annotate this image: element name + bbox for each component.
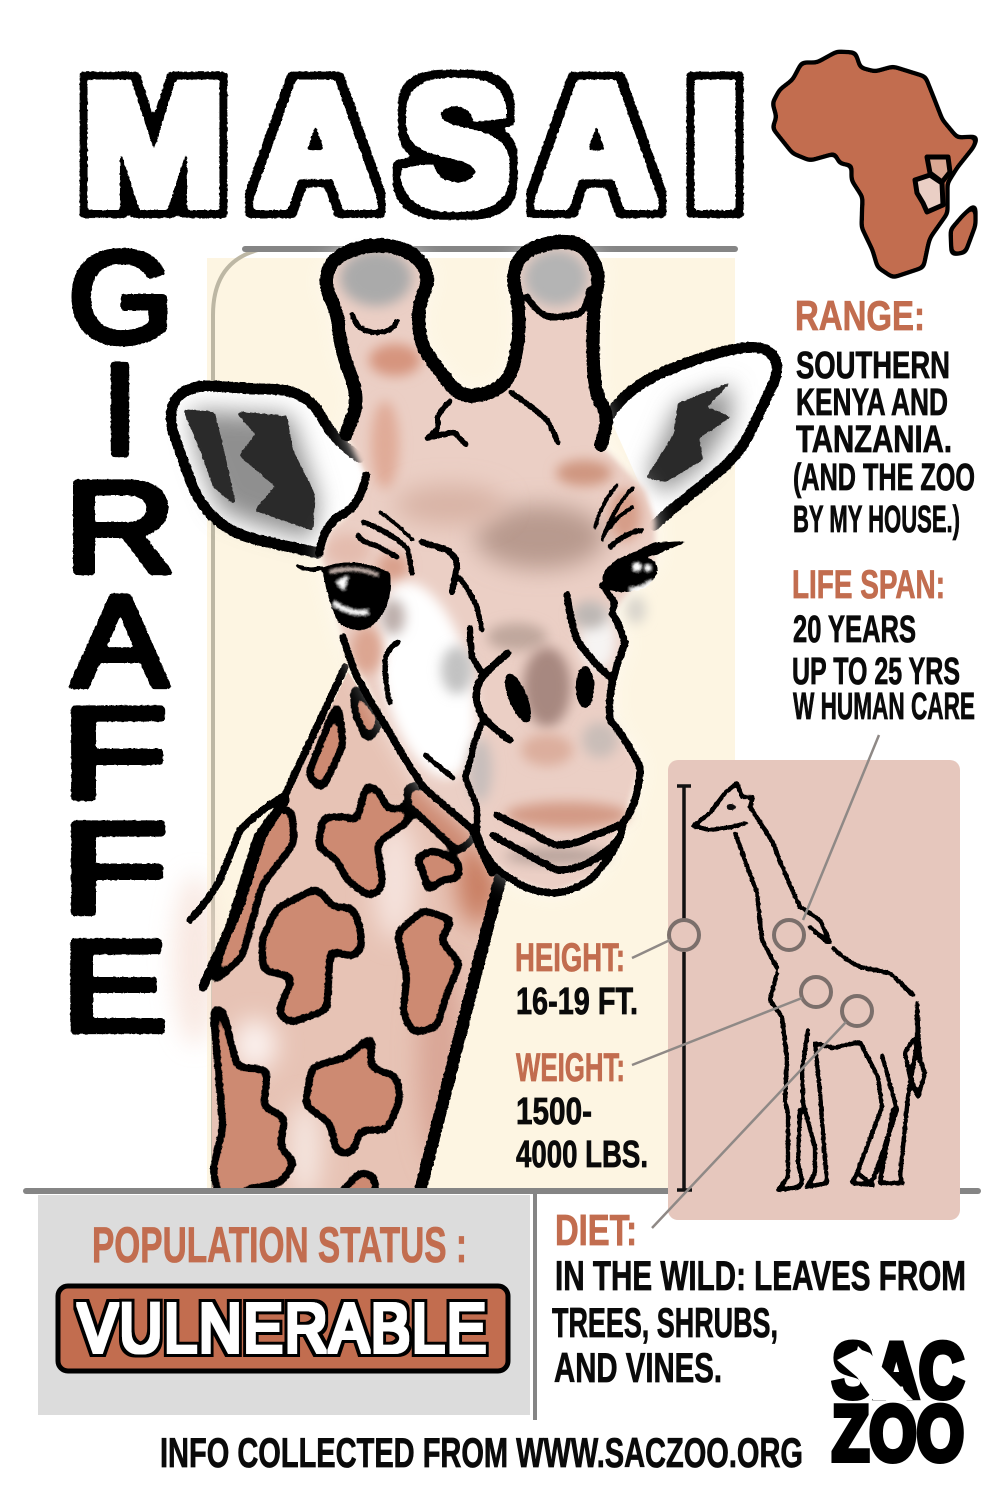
life span marker	[774, 920, 804, 950]
Africa continent	[773, 52, 977, 277]
title: MASAI: M	[81, 48, 226, 243]
head shading	[326, 250, 646, 864]
title: MASAI: I	[685, 48, 745, 243]
panel frame: top line	[245, 246, 735, 252]
giraffe illustration	[166, 238, 782, 1215]
text block: weight	[516, 1046, 648, 1176]
logo: Sac Zoo	[832, 1326, 964, 1477]
text block: range	[793, 292, 975, 541]
text block: height	[515, 936, 638, 1023]
Tanzania	[915, 175, 943, 212]
lower face outline	[343, 485, 642, 893]
text block: weight: 1500-	[516, 1091, 592, 1133]
text block: diet	[552, 1206, 966, 1391]
title: GIRAFFE: E	[61, 913, 168, 1059]
soft halo	[173, 875, 217, 1045]
left ear	[166, 384, 366, 553]
horn and forehead outline	[319, 242, 606, 553]
head glow	[322, 238, 655, 893]
title: GIRAFFE: I	[102, 336, 138, 482]
title: GIRAFFE: F	[61, 795, 168, 941]
height marker	[669, 920, 699, 950]
logo: Sac Zoo: ZOO	[832, 1389, 964, 1477]
text block: diet: DIET:	[555, 1206, 637, 1255]
text block: range: TANZANIA.	[796, 419, 952, 461]
text block: diet: AND VINES.	[554, 1344, 722, 1391]
title: MASAI: A	[254, 48, 377, 243]
weight marker	[801, 977, 831, 1007]
title: GIRAFFE: G	[68, 224, 174, 370]
text block: range: RANGE:	[795, 292, 925, 339]
text block: weight: 4000 LBS.	[516, 1134, 648, 1176]
small giraffe outline	[693, 783, 925, 1190]
map of Africa	[773, 52, 977, 277]
text block: weight: WEIGHT:	[516, 1046, 625, 1090]
text block: diet: TREES, SHRUBS,	[552, 1299, 778, 1346]
right eye	[599, 541, 688, 613]
panel frame: rounded corner line	[213, 250, 258, 1190]
logo giraffe silhouette	[837, 1346, 913, 1400]
title: MASAI: S	[401, 48, 511, 243]
heading: population status: POPULATION STATUS :	[92, 1217, 467, 1273]
title: GIRAFFE: A	[72, 568, 168, 714]
Madagascar	[951, 205, 975, 254]
vertical divider	[533, 1190, 537, 1420]
height bar	[677, 786, 692, 1190]
panel: height and body diagram	[668, 760, 960, 1220]
neck outlines	[190, 667, 501, 1192]
panel: population status	[38, 1195, 530, 1415]
neck spots	[211, 683, 478, 1215]
text block: height: HEIGHT:	[515, 936, 625, 980]
background panel: cream	[207, 258, 735, 1190]
text block: life span: 20 YEARS	[793, 609, 916, 651]
head fill	[322, 238, 655, 893]
title: GIRAFFE: R	[64, 454, 176, 600]
text block: life span	[792, 563, 975, 728]
title: MASAI	[81, 48, 745, 243]
title: GIRAFFE: F	[61, 680, 168, 826]
title: GIRAFFE	[61, 224, 176, 1059]
divider lines	[26, 1188, 978, 1194]
title: MASAI: A	[535, 48, 658, 243]
neck fill and shading	[212, 672, 498, 1188]
logo: Sac Zoo: SAC	[832, 1326, 964, 1414]
diet marker	[842, 996, 872, 1026]
leader lines	[632, 735, 879, 1228]
left eye	[298, 563, 390, 630]
Kenya	[927, 157, 950, 182]
right ear	[609, 343, 782, 525]
text block: height: 16-19 FT.	[516, 981, 638, 1023]
badge: vulnerable: VULNERABLE	[78, 1289, 488, 1367]
